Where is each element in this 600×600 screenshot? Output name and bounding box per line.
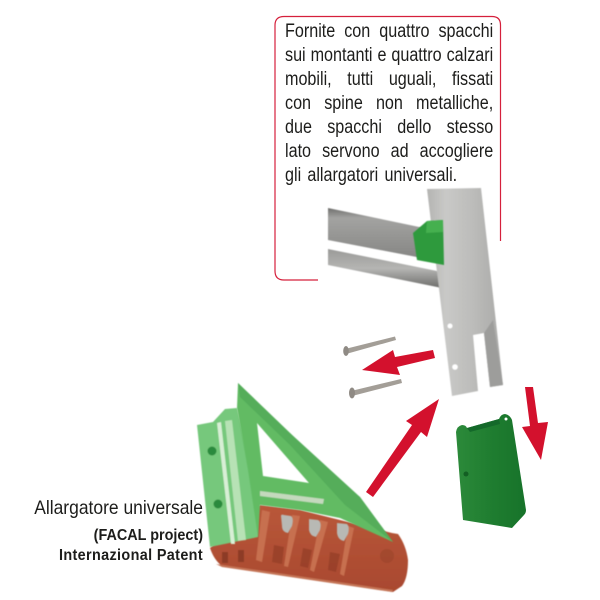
- note text block: con spine non metalliche,: [285, 93, 493, 114]
- note text block: [285, 21, 493, 186]
- note text block: gli allargatori universali.: [285, 165, 457, 186]
- note text block: sui montanti e quattro calzari: [285, 45, 493, 66]
- green movable shoe: [456, 414, 526, 528]
- arrow: downward: [522, 387, 548, 460]
- green end cap on rung: [413, 220, 444, 265]
- arrow: toward pins: [362, 350, 435, 375]
- pin lower: [349, 379, 402, 398]
- arrow: toward upright: [366, 399, 439, 497]
- red rounded note border: [275, 16, 500, 280]
- note text block: due spacchi dello stesso: [285, 117, 493, 138]
- pin upper: [343, 336, 396, 356]
- universal widener: green triangular frame: [237, 383, 393, 542]
- product label: (FACAL project): [94, 527, 203, 544]
- ladder upright with slot: [427, 188, 503, 396]
- ladder rungs: [328, 208, 442, 288]
- note text block: lato servono ad accogliere: [285, 141, 493, 162]
- product label: [34, 497, 203, 564]
- universal widener: green plate: [197, 408, 258, 547]
- universal widener: grey inserts: [281, 515, 349, 541]
- universal widener: brown base: [210, 505, 408, 592]
- product label: Allargatore universale: [34, 497, 203, 519]
- product label: Internazional Patent: [59, 547, 203, 564]
- note text block: Fornite con quattro spacchi: [285, 21, 493, 42]
- note text block: mobili, tutti uguali, fissati: [285, 69, 493, 90]
